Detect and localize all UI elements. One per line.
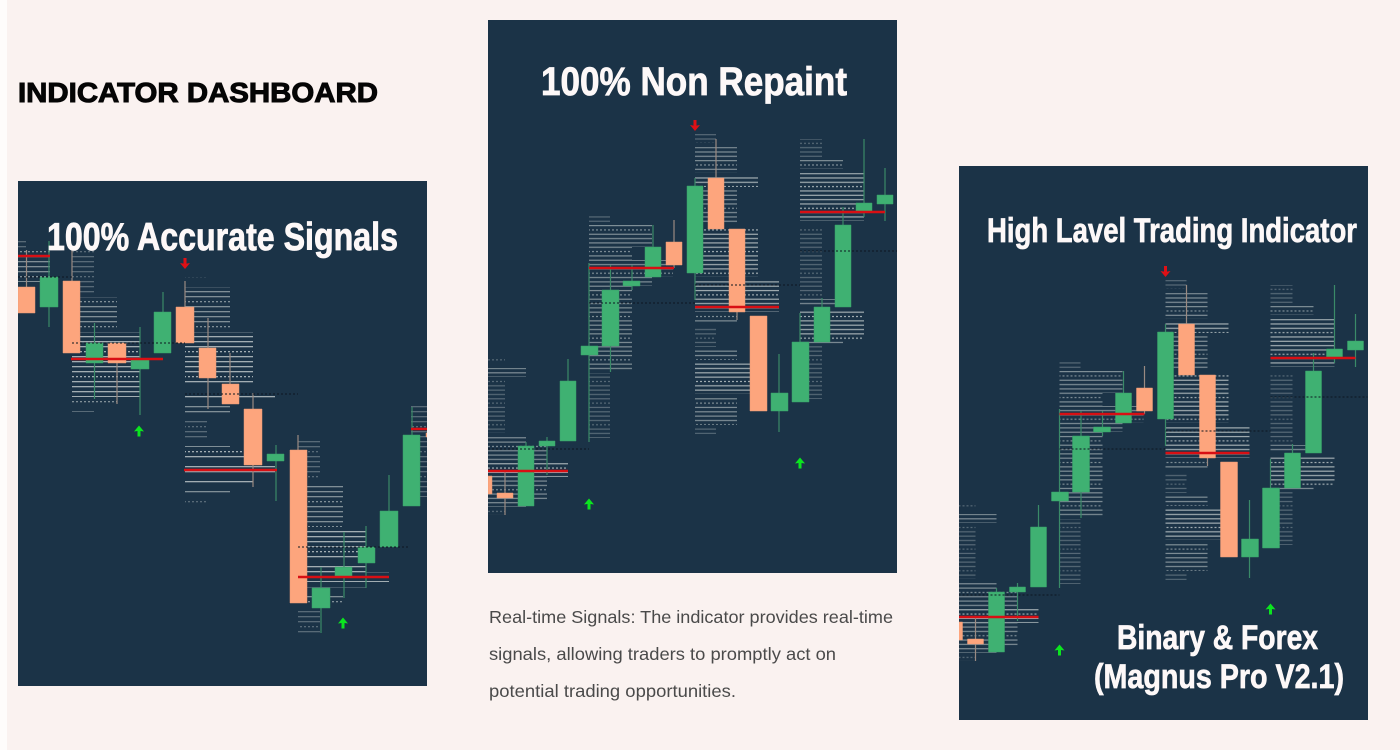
panel: high level trading indicator	[958, 166, 1368, 720]
product label line 1: Binary & Forex	[1117, 619, 1318, 657]
heading: indicator dashboard: INDICATOR DASHBOARD	[18, 77, 378, 108]
left page margin	[0, 0, 7, 750]
icon: green up arrow	[338, 618, 348, 628]
icon: green up arrow	[134, 426, 144, 436]
text block: real-time signals: signals, allowing traders to promptly act on	[489, 644, 836, 664]
text block: real-time signals	[489, 607, 893, 701]
text block: real-time signals: Real-time Signals: The indicator provides real-time	[489, 607, 893, 627]
panel title: 100% Accurate Signals	[47, 216, 398, 259]
candlestick chart 2	[488, 120, 897, 515]
candlestick chart 3	[958, 266, 1368, 661]
candlestick chart 1	[18, 241, 428, 633]
panel: 100% non repaint	[488, 20, 897, 573]
panel: 100% accurate signals	[18, 181, 428, 686]
panel title: 100% Non Repaint	[541, 60, 847, 104]
icon: red down arrow	[180, 258, 190, 269]
text block: real-time signals: potential trading opportunities.	[489, 681, 736, 701]
product label line 2: (Magnus Pro V2.1)	[1094, 658, 1344, 696]
